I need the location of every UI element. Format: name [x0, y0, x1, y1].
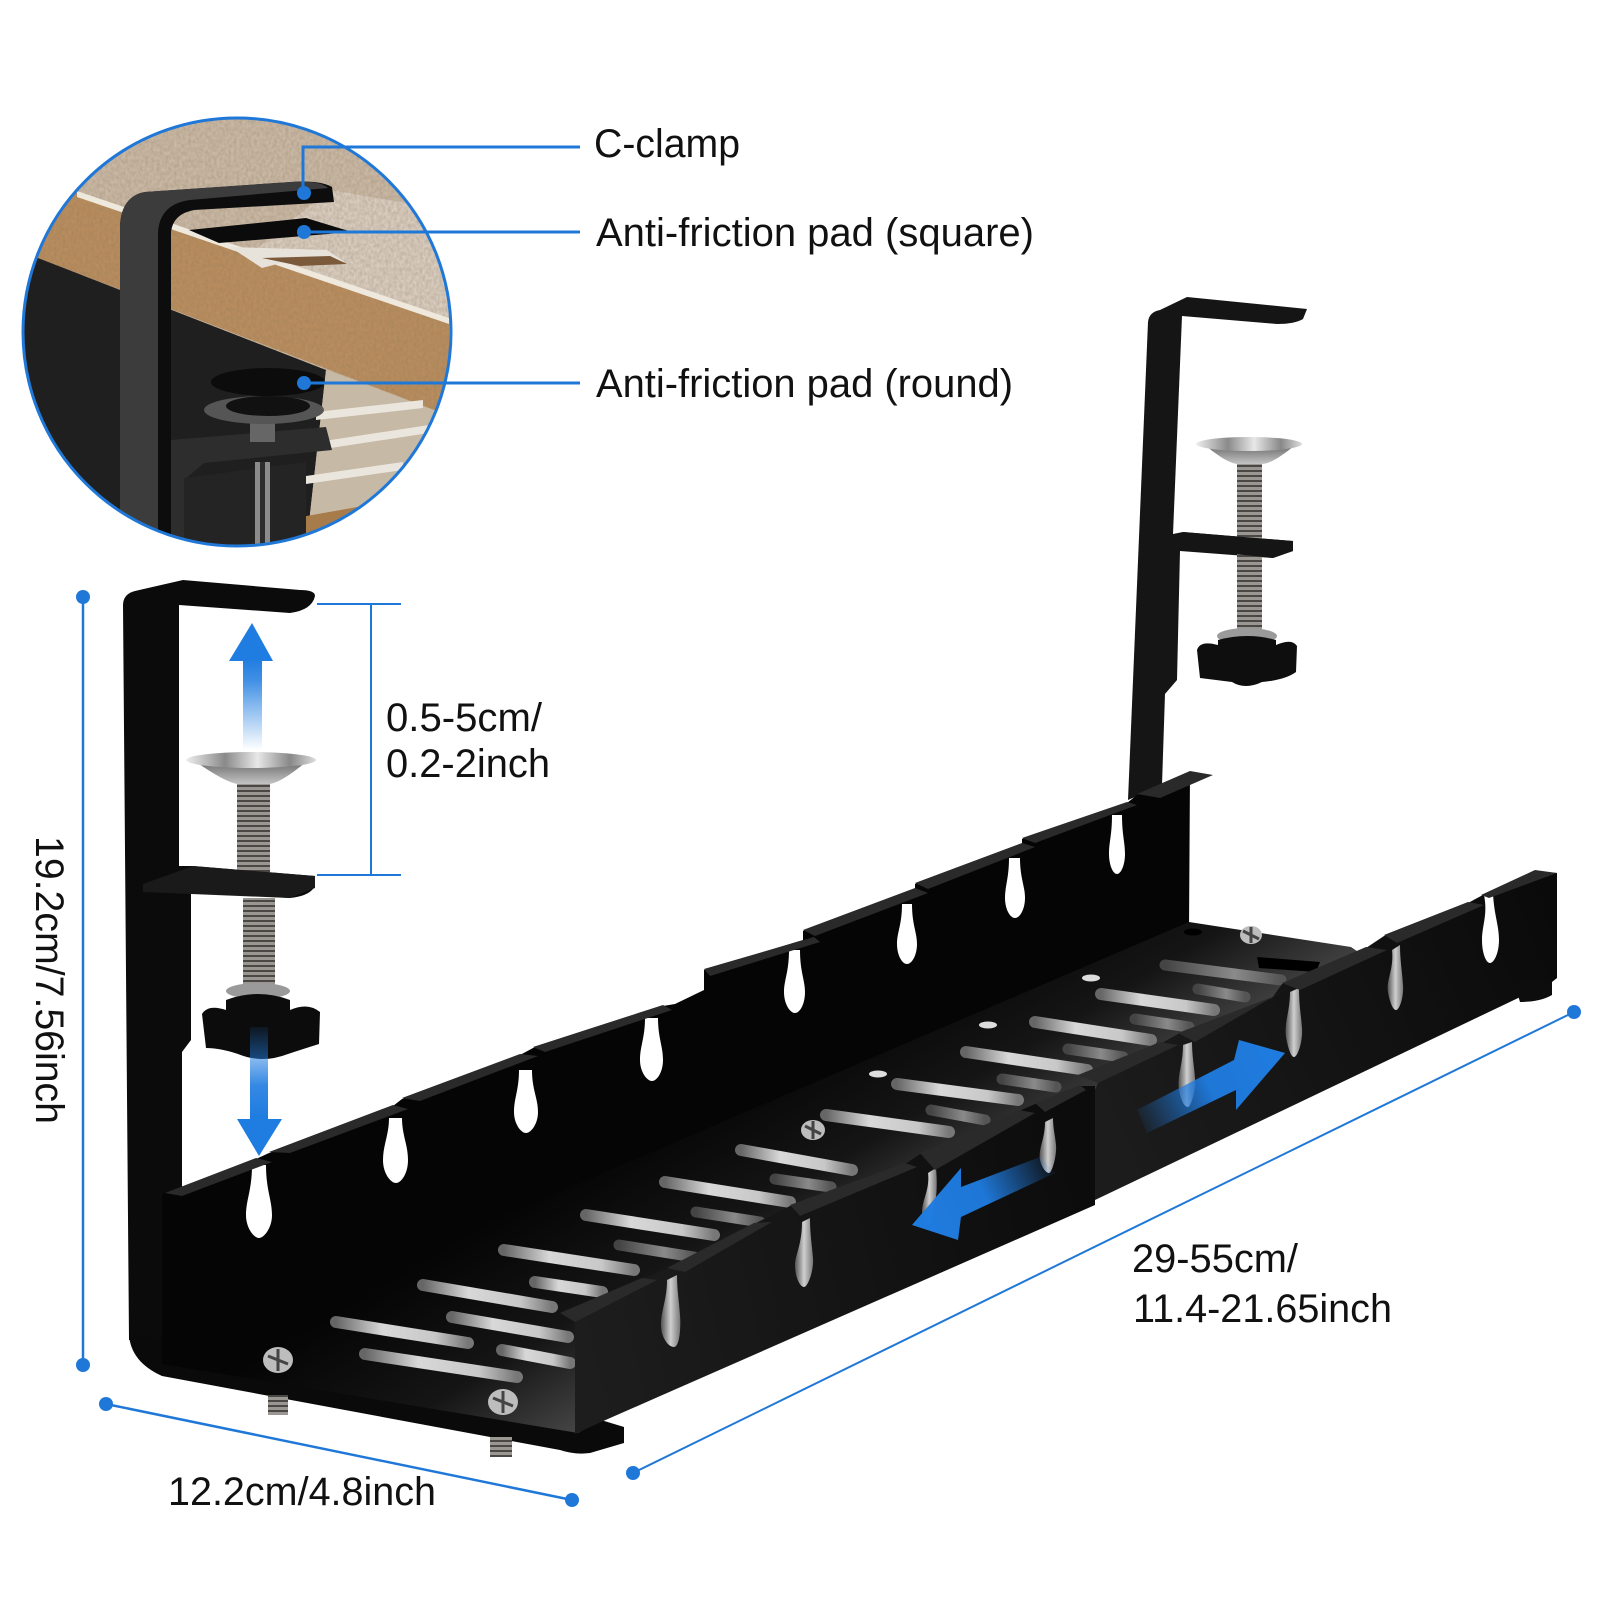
- inset: clamp close-up circle: [20, 110, 460, 560]
- dimension: length: [626, 1005, 1581, 1480]
- callout: C-clamp: C-clamp: [594, 122, 740, 166]
- white end keyhole: [1482, 893, 1499, 963]
- callout: square pad: [297, 211, 1034, 255]
- back wall lips: [165, 771, 1213, 1196]
- front wall inner section: [575, 1086, 1095, 1434]
- dimension: clamp opening: 0.5-5cm/: [386, 696, 543, 740]
- dimension: height: [27, 590, 90, 1372]
- screws: [263, 926, 1262, 1457]
- front wall keyholes: [661, 945, 1403, 1347]
- right clamp screw: [1155, 437, 1302, 686]
- left clamp upright: [123, 580, 315, 1340]
- dimension: length: 11.4-21.65inch: [1133, 1287, 1392, 1331]
- front wall lips: [560, 870, 1557, 1322]
- callout: C-clamp: [297, 122, 740, 200]
- left clamp assembly: [123, 580, 320, 1340]
- arrow: up adjust: [229, 623, 273, 750]
- left clamp screw: [143, 752, 320, 1059]
- arrow: down adjust: [237, 1027, 282, 1156]
- foot: [1514, 982, 1552, 1002]
- back wall keyholes: [246, 815, 1125, 1238]
- dimension: clamp opening: 0.2-2inch: [386, 742, 550, 786]
- dimension: length: 29-55cm/: [1132, 1237, 1299, 1281]
- callout: round pad: Anti-friction pad (round): [596, 362, 1013, 406]
- front wall outer section: [1095, 871, 1557, 1200]
- right clamp assembly: [1128, 297, 1307, 800]
- arrow: extend right: [1137, 1040, 1285, 1133]
- dimension: width: [99, 1397, 579, 1514]
- right clamp upright: [1128, 297, 1307, 800]
- floor slots: [336, 928, 1320, 1377]
- outer base corner: [129, 1335, 624, 1454]
- tray: [129, 771, 1557, 1457]
- dimension: clamp opening: [317, 604, 550, 875]
- callout: square pad: Anti-friction pad (square): [596, 211, 1034, 255]
- dimension: height: 19.2cm/7.56inch: [27, 836, 71, 1124]
- floor: [162, 922, 1370, 1436]
- callout: round pad: [297, 362, 1013, 406]
- arrow: extend left: [912, 1157, 1055, 1240]
- back wall: [162, 772, 1190, 1368]
- dimension: width: 12.2cm/4.8inch: [168, 1470, 436, 1514]
